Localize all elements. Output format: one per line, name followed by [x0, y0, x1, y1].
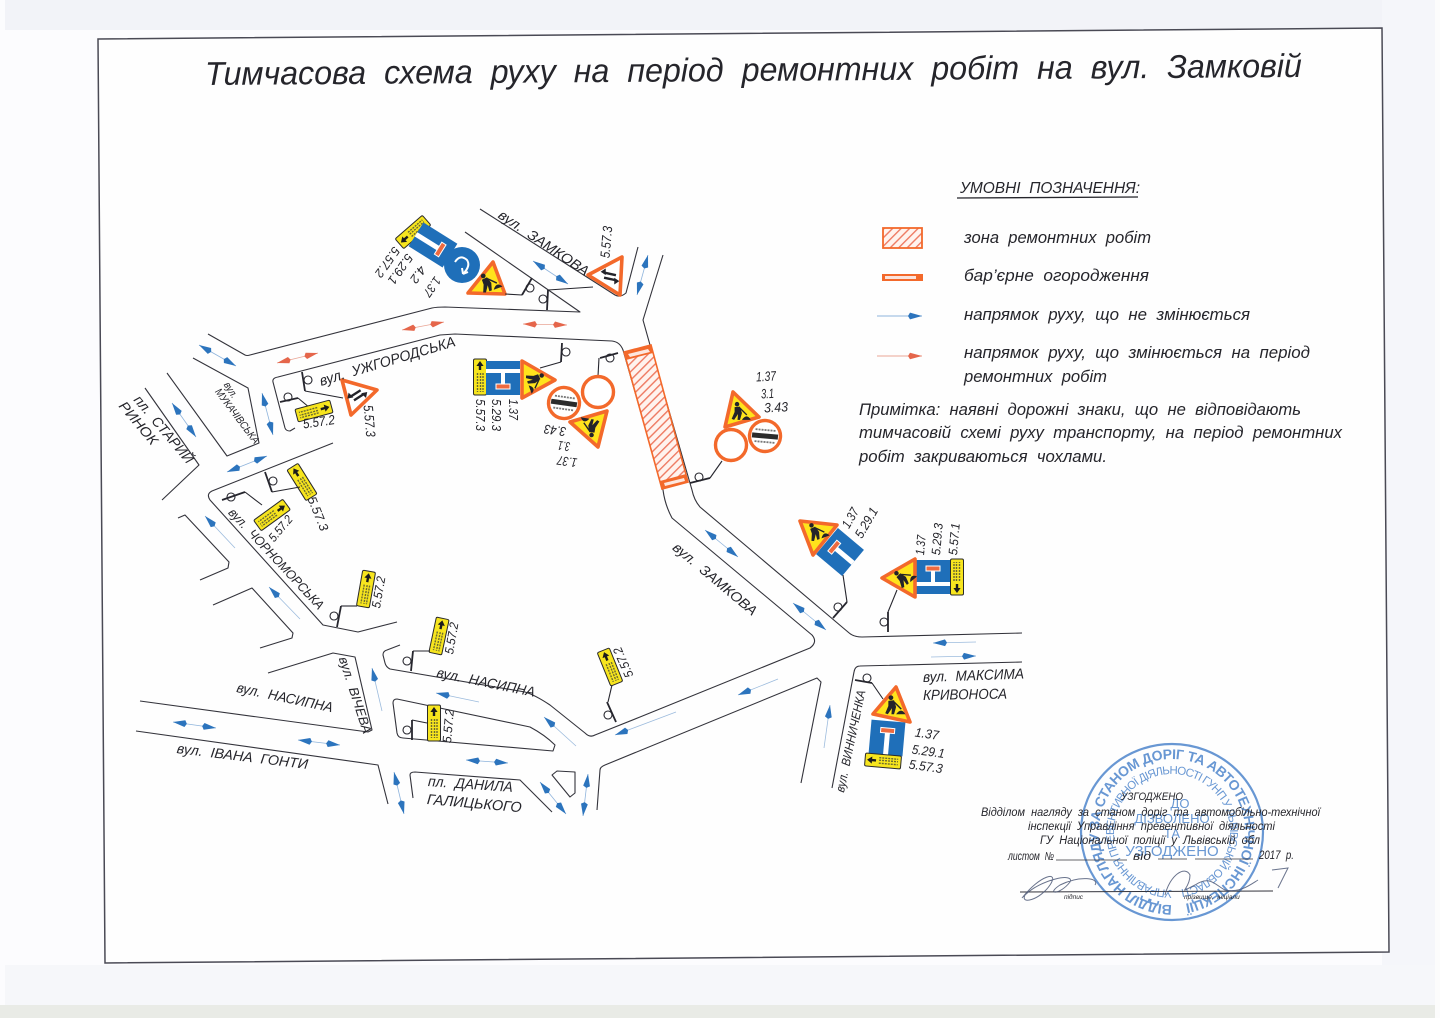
legend	[877, 180, 1310, 386]
approval text block: прізвище, ініціали	[1184, 893, 1240, 901]
label Danyla Halytskoho: ГАЛИЦЬКОГО	[426, 792, 522, 816]
label Maksyma Kryvonosa: КРИВОНОСА	[923, 687, 1007, 704]
sign group: Zamkova 1.37 5.29.1: 5.29.1	[852, 505, 881, 541]
approval text block: Відділом нагляду за станом доріг та автомобільно-технічної	[981, 807, 1321, 819]
round blue stamp: ТА	[1164, 826, 1180, 841]
round blue stamp: ДО	[1171, 796, 1189, 811]
plates on Chornomorska	[222, 463, 331, 544]
sign group: closure before repair zone (north): 1.37	[556, 453, 578, 470]
plates 5.57.2 on Nasypna: 5.57.2	[442, 621, 461, 655]
sign group: Krivonosa 1.37 5.29.3 5.57.1: 5.29.3	[929, 522, 946, 556]
work triangle 1.37	[468, 262, 505, 294]
codes	[302, 404, 378, 438]
title: Тимчасова схема руху на період ремонтних робіт на вул. Замковій	[205, 47, 1302, 92]
approval text block: ГУ Національної поліції у Львівській обл	[1040, 835, 1260, 847]
sign group: Zamkova 1.37 5.29.1	[800, 505, 881, 618]
sign group: Zamkova 1.37 5.29.1: 1.37	[839, 505, 862, 531]
note: тимчасовій схемі руху транспорту, на період ремонтних	[859, 424, 1343, 442]
approval text block: УЗГОДЖЕНО	[1120, 791, 1183, 803]
label Staryi Rynok: РИНОК	[116, 398, 162, 449]
round blue stamp: УПРАВЛІННЯ ПРЕВЕНТИВНОЇ ДІЯЛЬНОСТІ ГУНП У ЛЬВІВСЬКІЙ ОБЛАСТІ	[1106, 766, 1238, 898]
plates 5.57.2 on Nasypna: 5.57.2	[369, 575, 388, 609]
label Danyla Halytskoho: пл. ДАНИЛА	[427, 774, 513, 796]
label Mukachivska: вул.	[221, 380, 240, 401]
sign codes: 1.37	[420, 274, 444, 300]
sign group: closure after repair zone (south): 1.37	[756, 368, 777, 384]
sign group: Uzhhorodska west	[280, 372, 378, 438]
sign group: closure after repair zone (south)	[690, 368, 789, 483]
repair zone on Zamkova street	[624, 345, 688, 489]
sign group: closure after repair zone (south): 3.1	[761, 386, 774, 401]
approval text block: листом №	[1007, 851, 1054, 863]
label Uzhhorodska: вул. УЖГОРОДСЬКА	[318, 334, 457, 390]
sign codes: 5.57.2	[372, 244, 403, 280]
legend text: repair zone: зона ремонтних робіт	[963, 229, 1151, 247]
plates on Chornomorska: 5.57.2	[266, 512, 296, 544]
approval text block: від	[1133, 851, 1151, 863]
triangle 5.57.3	[342, 380, 377, 415]
label Vynnychenka: вул. ВИННИЧЕНКА	[833, 689, 868, 793]
sign group: Krivonosa 1.37 5.29.3 5.57.1: 5.57.1	[946, 523, 963, 556]
label Nasypna lower: вул. НАСИПНА	[235, 679, 335, 715]
post	[505, 278, 534, 295]
legend swatch: repair zone	[883, 228, 922, 248]
plate 5.57.2	[395, 215, 431, 249]
round blue stamp: ВІДДІЛ НАГЛЯДУ ЗА СТАНОМ ДОРІГ ТА АВТОТЕХНІЧНОЇ ІНСПЕКЦІЇ	[1089, 749, 1255, 916]
sign group: Zamkova north 5.57.3	[539, 225, 622, 310]
street labels	[116, 206, 1024, 816]
blue sign 5.29.1	[409, 223, 457, 267]
legend text: barrier: бар’єрне огородження	[964, 267, 1149, 285]
sign group: blue sign with triangle near repair zone: 5.57.3	[473, 399, 487, 431]
approval text block: підпис	[1064, 893, 1084, 901]
sign group: closure before repair zone (north): 3.1	[557, 438, 571, 454]
barrier bottom	[660, 474, 688, 489]
label Maksyma Kryvonosa	[923, 666, 1024, 704]
sign codes: 5.29.1	[385, 251, 416, 287]
approval text block: 2017 р.	[1258, 850, 1294, 862]
label Chornomorska: вул. ЧОРНОМОРСЬКА	[226, 505, 327, 612]
blue traffic arrows	[172, 255, 976, 816]
note	[858, 401, 1343, 466]
sign group: closure before repair zone (north): 3.43	[543, 421, 567, 439]
barrier top	[624, 345, 653, 360]
sign group: blue sign with triangle near repair zone	[473, 343, 570, 431]
label Mukachivska: МУКАЧІВСЬКА	[212, 386, 262, 446]
red changed-direction arrows	[277, 322, 567, 363]
posts	[280, 372, 343, 408]
plates 5.57.2 on Nasypna: 5.57.2	[611, 645, 636, 680]
sign group: Vynnychenka 1.37 5.29.1 5.57.3: 5.29.1	[911, 742, 946, 761]
blue circle 4.2	[444, 247, 480, 283]
approval text block: інспекції Управління превентивної діяльності	[1028, 821, 1275, 833]
sign group: blue sign with triangle near repair zone: 5.29.3	[489, 399, 503, 431]
plates 5.57.2 on Nasypna: 5.57.2	[440, 708, 457, 744]
sign group: north of Uzhhorodska	[372, 215, 534, 300]
sign group: closure before repair zone (north)	[543, 353, 618, 470]
label Danyla Halytskoho	[426, 774, 522, 816]
plate 5.57.2	[295, 400, 333, 422]
legend arrow: changed direction	[877, 355, 922, 357]
sign group: Vynnychenka 1.37 5.29.1 5.57.3: 5.57.3	[908, 757, 944, 776]
handwritten signatures	[1022, 868, 1288, 900]
sign codes	[372, 244, 444, 300]
sign group: blue sign with triangle near repair zone: 1.37	[506, 399, 520, 421]
plates on Chornomorska: 5.57.3	[305, 494, 331, 533]
note: Примітка: наявні дорожні знаки, що не відповідають	[859, 401, 1301, 419]
sign group: Vynnychenka 1.37 5.29.1 5.57.3: 1.37	[914, 725, 941, 743]
label Staryi Rynok: пл. СТАРИЙ	[131, 391, 199, 467]
note: робіт закриваються чохлами.	[858, 448, 1107, 466]
sign group: Vynnychenka 1.37 5.29.1 5.57.3	[855, 674, 946, 776]
legend text: changed direction	[963, 344, 1310, 386]
round blue stamp: УЗГОДЖЕНО	[1125, 843, 1219, 860]
label Nasypna upper: вул. НАСИПНА	[435, 664, 537, 700]
legend arrow: unchanged direction	[877, 315, 922, 317]
post	[539, 287, 593, 310]
road network	[136, 209, 1022, 812]
legend heading: УМОВНІ ПОЗНАЧЕННЯ:	[959, 180, 1140, 197]
legend text: changed direction: напрямок руху, що змінюється на період	[964, 344, 1310, 362]
sign group: Krivonosa 1.37 5.29.3 5.57.1	[880, 522, 964, 632]
label Maksyma Kryvonosa: вул. МАКСИМА	[923, 666, 1024, 686]
sign group: Krivonosa 1.37 5.29.3 5.57.1: 1.37	[913, 534, 929, 556]
sign group: closure after repair zone (south): 3.43	[764, 399, 789, 415]
sign codes: 4.2	[407, 263, 429, 286]
approval text block	[981, 791, 1321, 901]
legend swatch: barrier	[882, 274, 923, 281]
legend text: unchanged direction: напрямок руху, що не змінюється	[964, 306, 1250, 324]
codes: 5.57.3	[361, 404, 378, 438]
plates 5.57.2 on Nasypna	[330, 570, 636, 744]
round blue stamp: ДІЗВОЛЕНО	[1134, 811, 1210, 826]
codes: 5.57.2	[302, 412, 336, 431]
legend text: changed direction: ремонтних робіт	[963, 368, 1107, 386]
label Zamkova south: вул. ЗАМКОВА	[670, 539, 761, 619]
label Vicheva: вул. ВІЧЕВА	[336, 655, 375, 735]
label Ivana Honty: вул. ІВАНА ГОНТИ	[176, 740, 310, 772]
code 5.57.3: 5.57.3	[598, 225, 615, 259]
label Zamkova north: вул. ЗАМКОВА	[496, 206, 592, 279]
